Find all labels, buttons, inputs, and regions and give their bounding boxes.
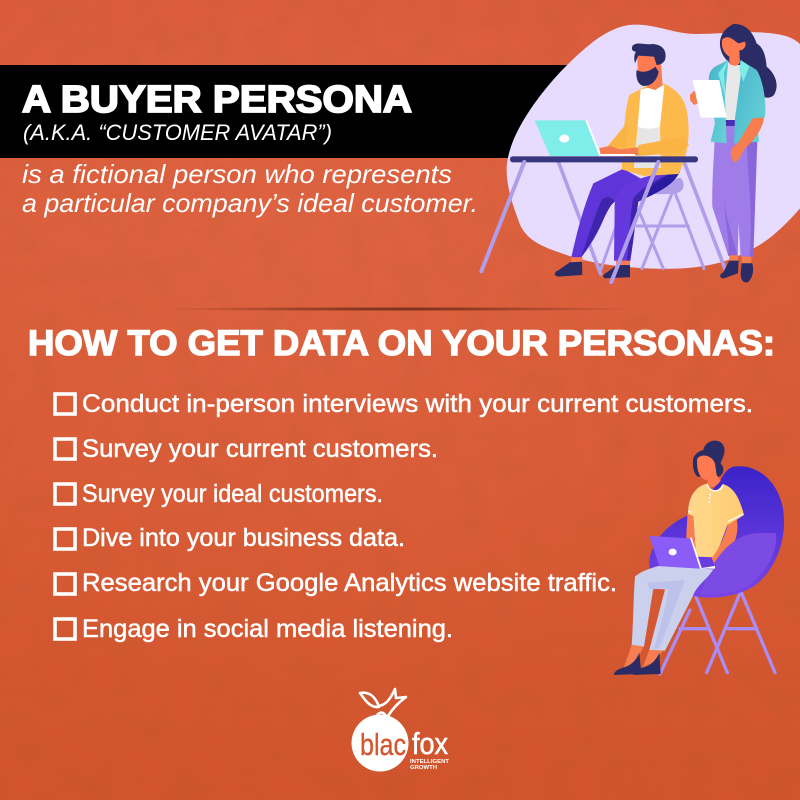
woman hair back [693, 441, 725, 477]
woman heels [614, 653, 661, 675]
woman shirt [724, 65, 742, 120]
chair shell [649, 466, 784, 598]
logo [352, 689, 449, 772]
man hands [599, 146, 638, 155]
man arms [607, 123, 627, 153]
divider shadow [160, 307, 640, 311]
paper [693, 80, 727, 118]
woman trousers [712, 125, 757, 257]
logo sprout [360, 689, 406, 721]
desk front legs [481, 162, 658, 282]
woman tshirt [688, 483, 744, 557]
illustration: woman in chair with laptop [614, 441, 784, 675]
man head [647, 63, 663, 90]
laptop [649, 536, 701, 569]
blob backdrop [507, 25, 800, 269]
logo word fox: fox [412, 726, 448, 761]
desk top [510, 156, 698, 162]
woman trousers [632, 566, 713, 651]
title: A BUYER PERSONA [22, 79, 412, 121]
stool [601, 190, 704, 270]
checklist item 1: Conduct in-person interviews with your current customers. [82, 390, 753, 418]
checklist [55, 390, 753, 643]
chair legs [660, 593, 775, 674]
man tshirt [634, 85, 664, 168]
logo word blac: blac [360, 727, 406, 762]
cushion [701, 533, 776, 594]
section heading: HOW TO GET DATA ON YOUR PERSONAS: [28, 324, 775, 363]
definition text: is a fictional person who represents [22, 159, 452, 189]
woman neck and face [697, 456, 721, 487]
checklist item 6: Engage in social media listening. [82, 615, 453, 643]
checklist item 4: Dive into your business data. [82, 524, 405, 552]
woman belt [724, 119, 735, 126]
shirt buttons [708, 494, 711, 503]
logo tagline: INTELLIGENT [410, 759, 449, 765]
desk back legs [558, 162, 725, 274]
checklist item 5: Research your Google Analytics website traffic. [82, 569, 617, 597]
stool seat [647, 178, 684, 194]
man shoes [571, 257, 630, 266]
woman [690, 24, 777, 282]
illustration: man and woman at desk [481, 24, 800, 282]
logo circle [352, 714, 408, 772]
checklist item 2: Survey your current customers. [82, 435, 438, 463]
logo tagline [410, 759, 449, 771]
woman jacket [709, 60, 765, 143]
definition text [22, 159, 478, 218]
checklist item 3: Survey your ideal customers. [82, 480, 383, 508]
laptop [535, 120, 635, 156]
woman shoes [729, 255, 751, 263]
shirt details [688, 484, 743, 521]
logo tagline: GROWTH [410, 765, 437, 771]
woman lower legs [624, 645, 663, 667]
definition text: a particular company’s ideal customer. [22, 188, 478, 218]
woman arm [686, 514, 737, 565]
woman hair [720, 24, 777, 98]
woman face [722, 37, 746, 66]
black title banner [0, 65, 570, 158]
man front leg [614, 169, 681, 262]
man [555, 43, 689, 278]
man back leg [571, 169, 643, 258]
subtitle: (A.K.A. “CUSTOMER AVATAR”) [23, 120, 332, 145]
woman arm [731, 117, 764, 163]
man cardigan [622, 84, 689, 176]
